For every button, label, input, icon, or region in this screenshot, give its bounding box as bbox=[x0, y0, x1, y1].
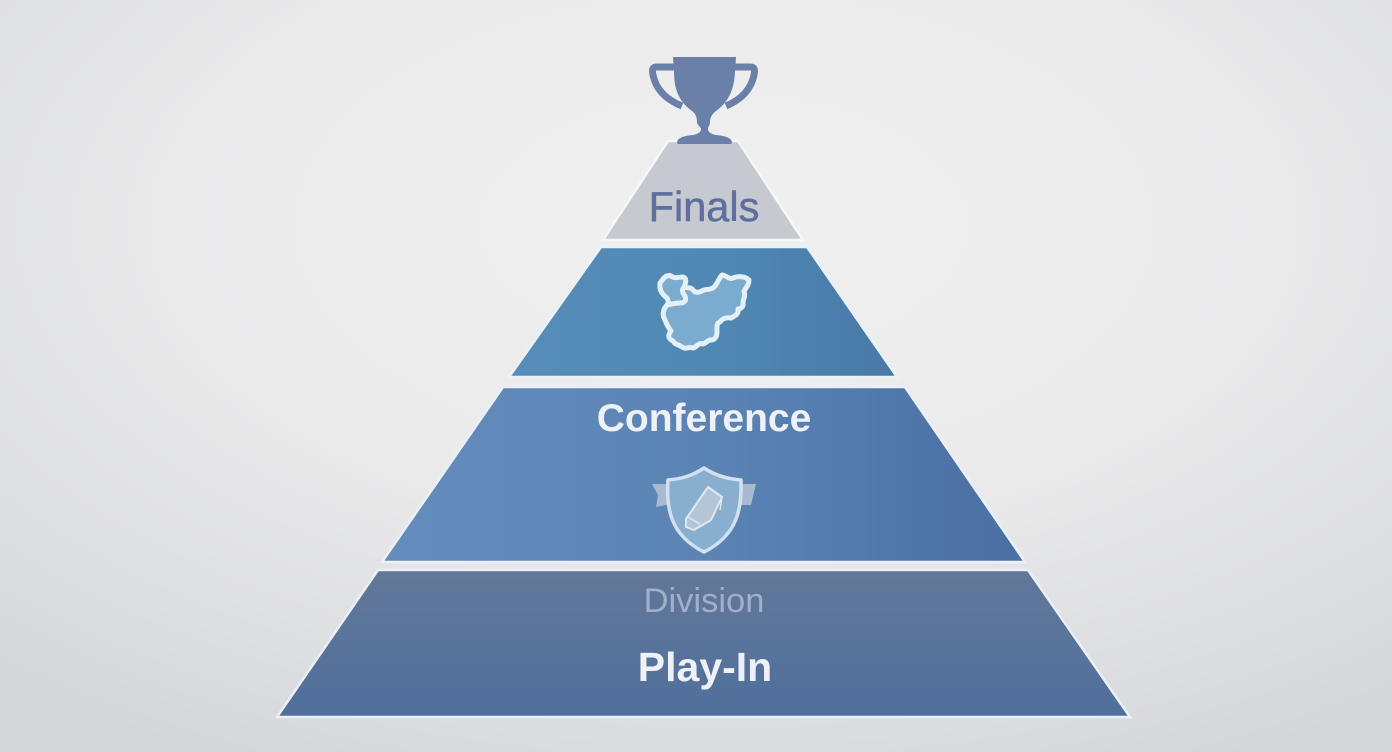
icon: region map bbox=[660, 275, 749, 348]
heading: Play-In: Play-In bbox=[638, 644, 772, 690]
heading: Finals: Finals bbox=[649, 183, 759, 230]
panel: pyramid tier map bbox=[509, 247, 897, 377]
panel: pyramid tier Finals bbox=[603, 141, 803, 240]
panel: pyramid tier Play-In bbox=[277, 570, 1130, 717]
text: Division: Division bbox=[644, 582, 764, 620]
icon: shield with whistle bbox=[652, 468, 756, 552]
icon: trophy bbox=[652, 57, 755, 144]
heading: Conference: Conference bbox=[597, 397, 811, 440]
panel: pyramid tier Conference bbox=[382, 387, 1025, 562]
